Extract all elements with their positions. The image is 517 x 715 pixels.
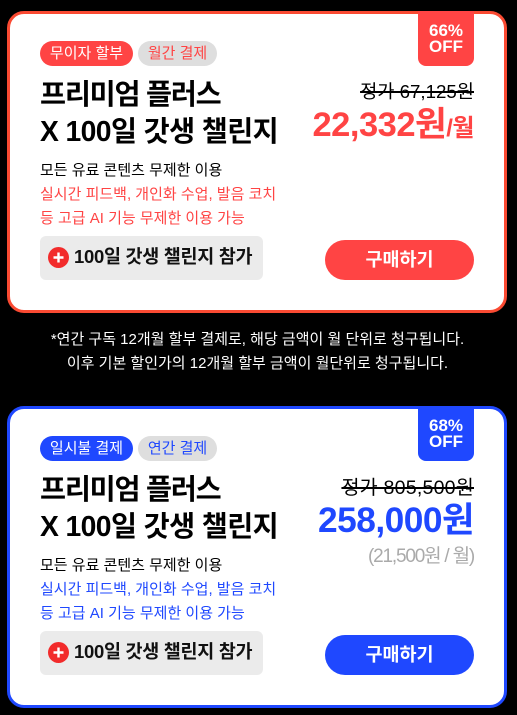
tag: lump-sum payment: 일시불 결제 — [50, 440, 123, 457]
sale price: 22,332원/월 — [312, 106, 474, 144]
original price: 정가 805,500원 — [341, 477, 474, 499]
description — [40, 162, 276, 227]
badge: 68% off — [418, 406, 474, 461]
original price: 정가 67,125원 — [360, 81, 474, 102]
badge: 66% off: OFF — [429, 37, 463, 56]
panel: yearly plan — [7, 406, 507, 708]
title: X 100일 갓생 챌린지 — [40, 510, 278, 542]
tag: interest-free installment: 무이자 할부 — [50, 45, 123, 62]
description: 등 고급 AI 기능 무제한 이용 가능 — [40, 605, 245, 622]
button: join challenge — [40, 236, 263, 280]
icon: plus — [48, 247, 69, 268]
button: buy — [325, 240, 474, 280]
badge: 68% off: OFF — [429, 432, 463, 451]
tag: yearly payment: 연간 결제 — [148, 440, 207, 457]
description: 실시간 피드백, 개인화 수업, 발음 코치 — [40, 186, 276, 203]
title: 프리미엄 플러스 — [40, 78, 220, 110]
description: 모든 유료 콘텐츠 무제한 이용 — [40, 557, 222, 574]
description — [40, 557, 276, 622]
footnote — [51, 331, 464, 372]
tag: lump-sum payment — [40, 436, 133, 461]
footnote: 이후 기본 할인가의 12개월 할부 금액이 월단위로 청구됩니다. — [67, 355, 448, 372]
sale price: 258,000원 — [318, 501, 474, 540]
monthly equivalent: (21,500원 / 월) — [368, 546, 474, 567]
tag: yearly payment — [138, 436, 217, 461]
title: X 100일 갓생 챌린지 — [40, 114, 278, 146]
description: 실시간 피드백, 개인화 수업, 발음 코치 — [40, 581, 276, 598]
label: 100일 갓생 챌린지 참가 — [74, 246, 252, 267]
badge: 66% off: 66% — [429, 20, 463, 40]
icon: plus — [48, 642, 69, 663]
tag: monthly payment — [138, 41, 217, 66]
footnote: *연간 구독 12개월 할부 결제로, 해당 금액이 월 단위로 청구됩니다. — [51, 331, 464, 348]
tag: monthly payment: 월간 결제 — [148, 45, 207, 62]
button: buy: 구매하기 — [365, 249, 434, 270]
button: join challenge — [40, 631, 263, 675]
button: buy — [325, 635, 474, 675]
button: buy: 구매하기 — [365, 644, 434, 665]
label: 100일 갓생 챌린지 참가 — [74, 641, 252, 662]
description: 등 고급 AI 기능 무제한 이용 가능 — [40, 210, 245, 227]
title: 프리미엄 플러스 — [40, 473, 220, 505]
panel: monthly plan — [7, 11, 507, 313]
title — [40, 78, 278, 146]
badge: 68% off: 68% — [429, 416, 463, 434]
tag: interest-free installment — [40, 41, 133, 66]
badge: 66% off — [418, 11, 474, 66]
title — [40, 473, 278, 542]
description: 모든 유료 콘텐츠 무제한 이용 — [40, 162, 222, 179]
